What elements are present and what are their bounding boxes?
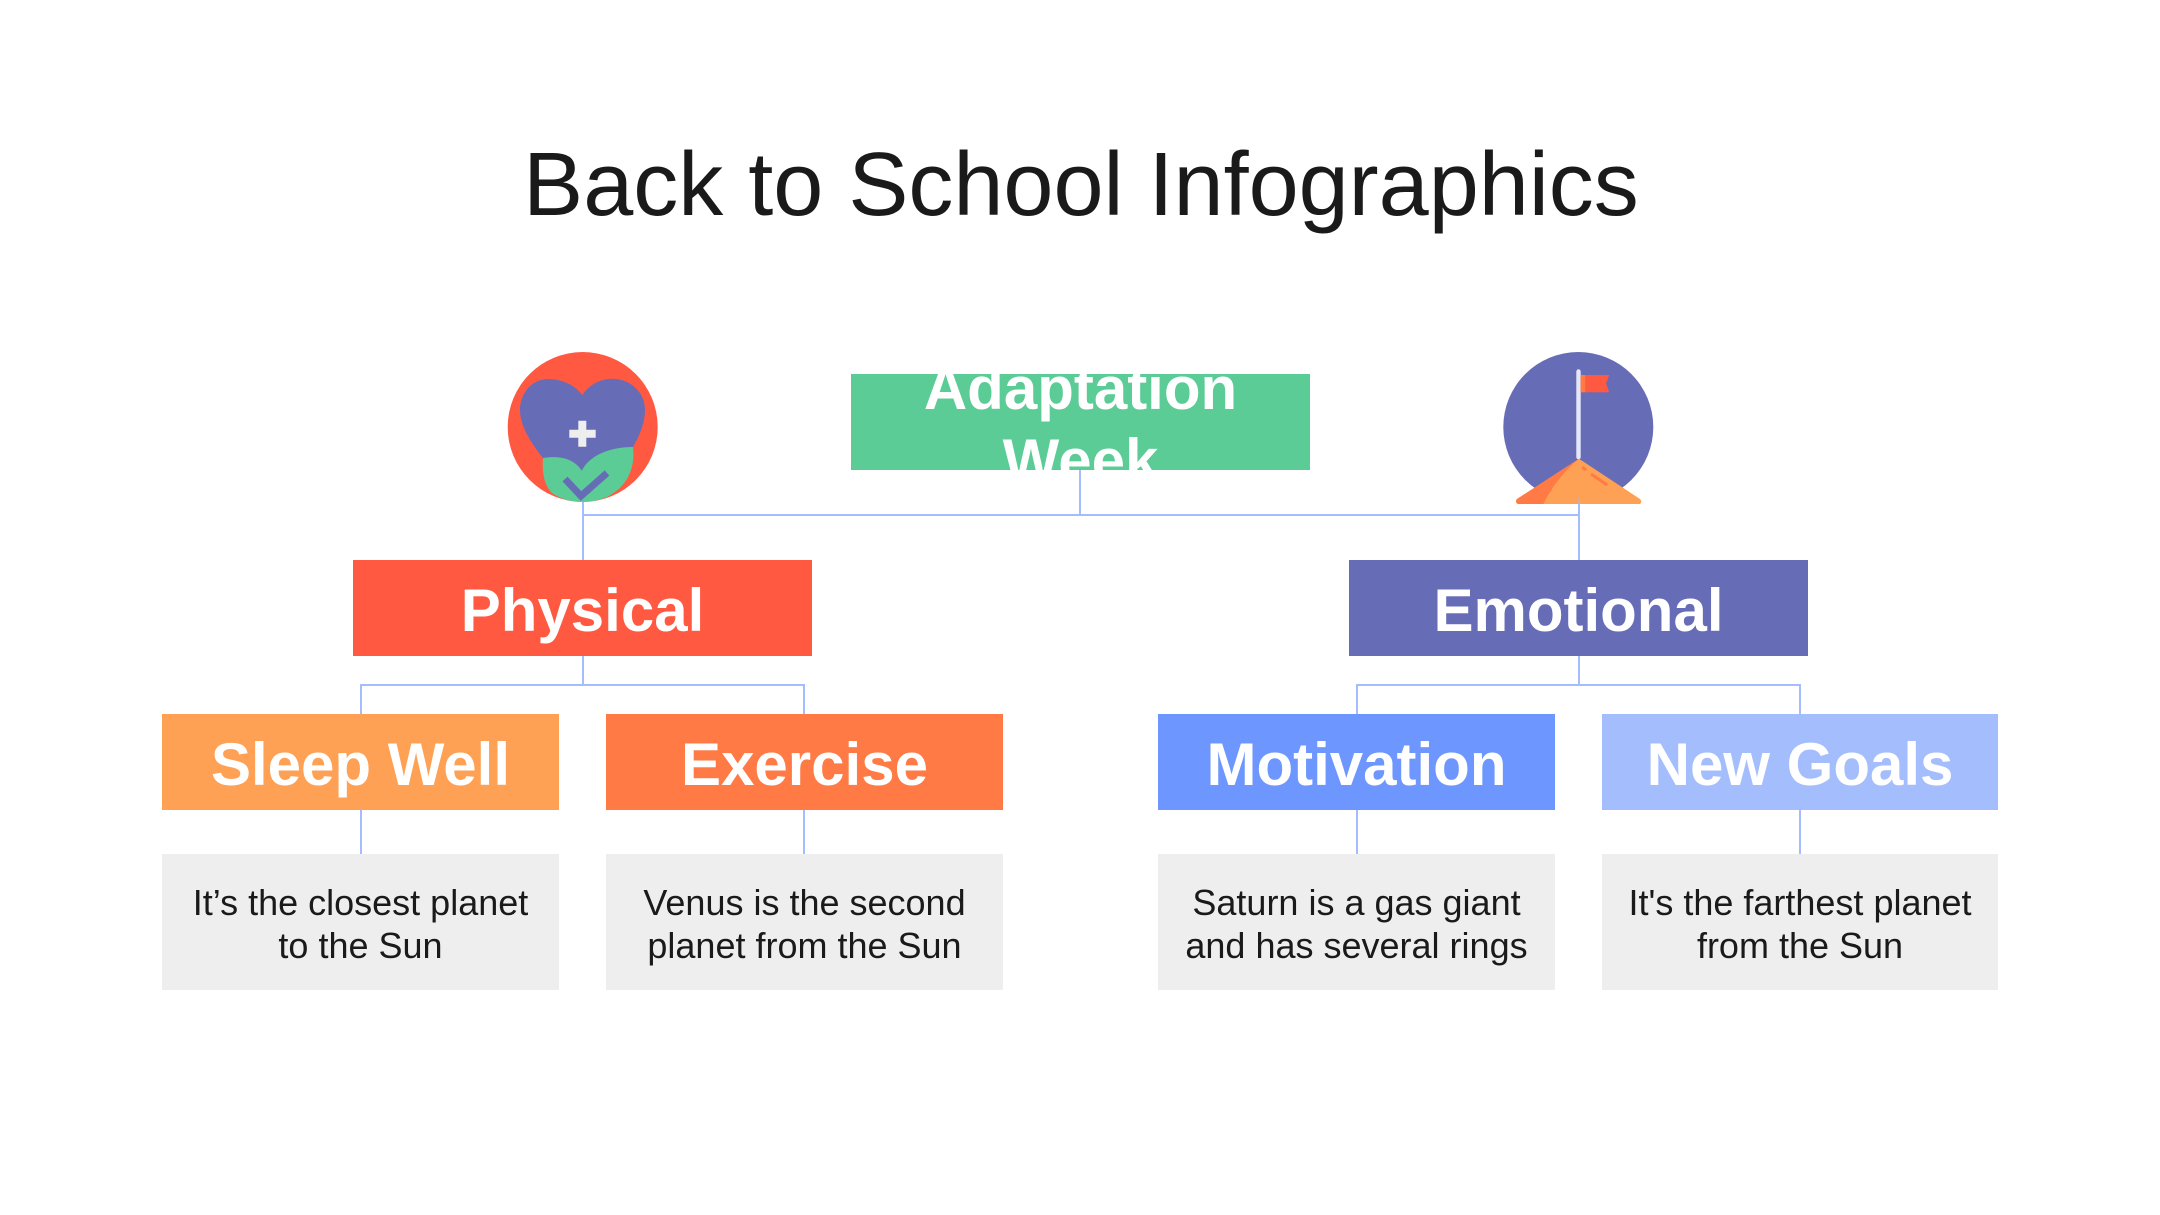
root box: Adaptation Week xyxy=(851,374,1310,470)
description: New Goals: It's the farthest planet xyxy=(1628,882,1972,922)
branch box: Physical: Physical xyxy=(461,577,704,644)
box: New Goals xyxy=(1602,714,1998,810)
description: Motivation xyxy=(1158,854,1555,990)
root box: Adaptation Week: Week xyxy=(1003,427,1158,494)
description: Sleep Well xyxy=(162,854,559,990)
box: Motivation xyxy=(1158,714,1555,810)
branch box: Emotional xyxy=(1349,560,1808,656)
box: Exercise: Exercise xyxy=(681,731,928,798)
description: Exercise xyxy=(606,854,1003,990)
description: Motivation: and has several rings xyxy=(1185,924,1528,966)
box: Motivation: Motivation xyxy=(1206,731,1506,798)
branch box: Emotional: Emotional xyxy=(1433,577,1724,644)
connector stub over root text xyxy=(1079,470,1081,515)
icon: mountain with flag xyxy=(1503,352,1654,504)
branch box: Physical xyxy=(353,560,812,656)
description: Sleep Well: It’s the closest planet xyxy=(193,882,528,922)
title: Back to School Infographics xyxy=(523,135,1639,235)
description: Motivation: Saturn is a gas giant xyxy=(1192,882,1521,922)
root box: Adaptation Week: Adaptation xyxy=(924,355,1237,422)
box: Sleep Well: Sleep Well xyxy=(211,731,510,798)
box: Sleep Well xyxy=(162,714,559,810)
description: New Goals: from the Sun xyxy=(1697,924,1903,966)
description: Exercise: Venus is the second xyxy=(643,882,966,922)
description: Sleep Well: to the Sun xyxy=(278,924,443,966)
box: New Goals: New Goals xyxy=(1647,731,1953,798)
description: New Goals xyxy=(1602,854,1998,990)
icon: heart with leaves xyxy=(508,352,658,502)
box: Exercise xyxy=(606,714,1003,810)
description: Exercise: planet from the Sun xyxy=(647,924,962,966)
